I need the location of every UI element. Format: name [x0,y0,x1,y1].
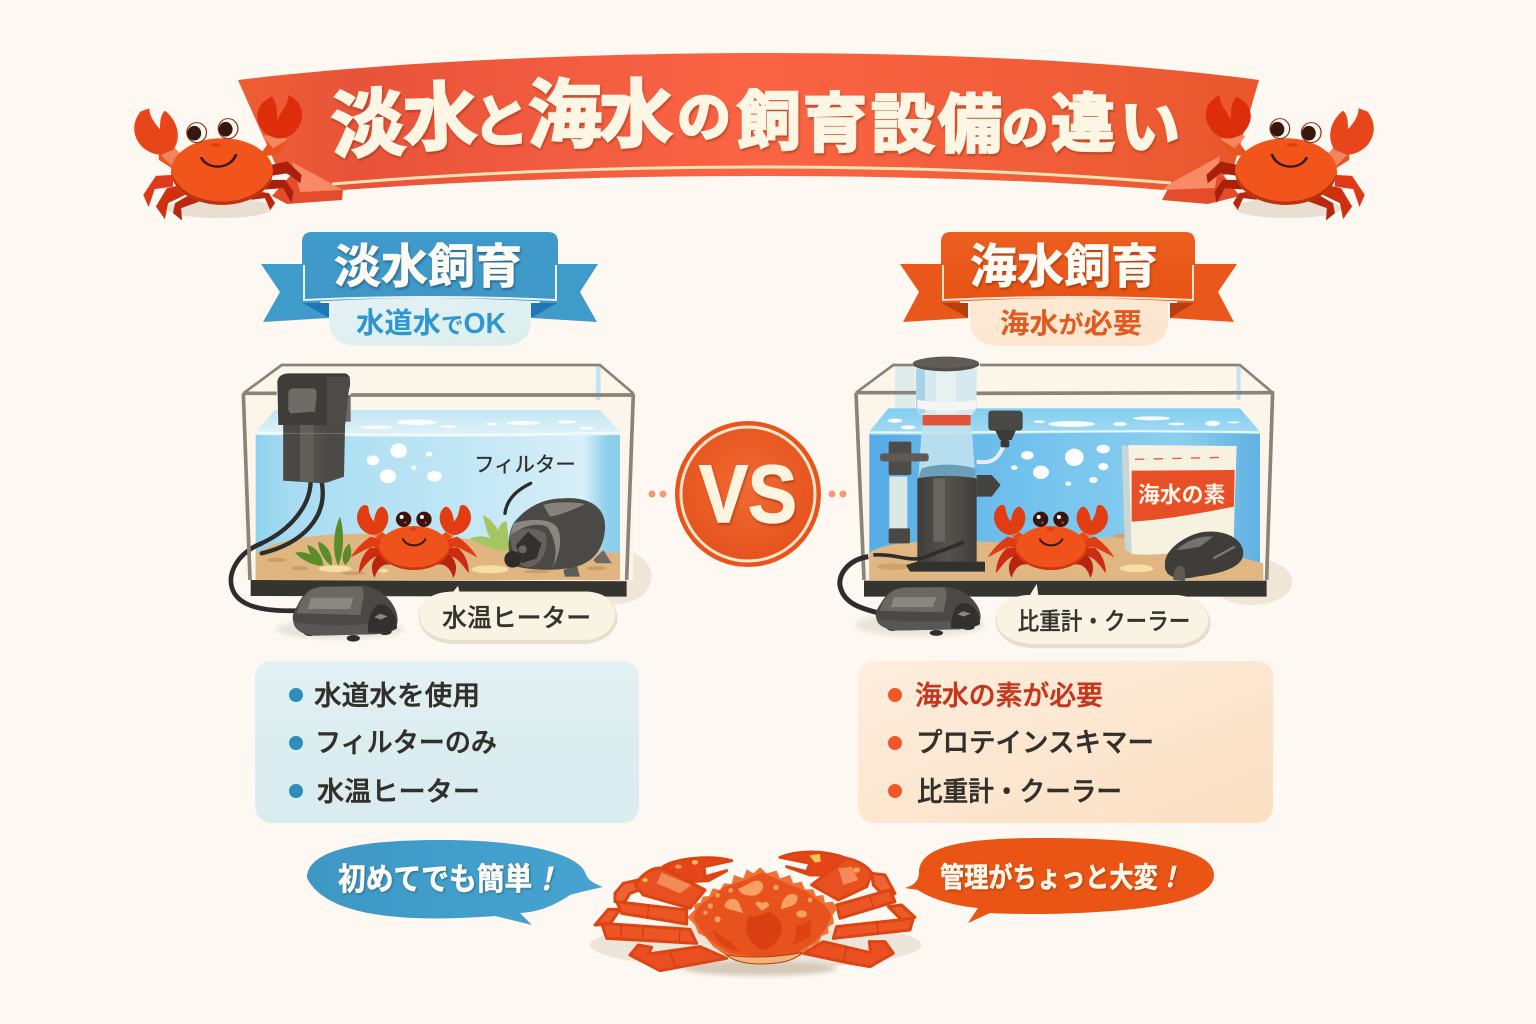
subtitle pill [970,298,1168,346]
banner ribbon [238,53,1259,190]
specific gravity and cooler callout [996,584,1211,648]
bubble text: 管理がちょっと大変！ [940,861,1182,893]
ribbon heading: 海水飼育 [970,240,1158,293]
ribbon main [941,232,1195,302]
title text: の [1002,102,1048,154]
ground shadow [590,921,921,969]
left legs [595,858,732,971]
title text: 飼 [737,86,801,158]
tank shadow [582,549,652,604]
tank frame [856,365,1273,580]
crab mascot left [134,95,302,220]
bullet 3: 水温ヒーター [317,777,480,807]
specific gravity and cooler callout: 比重計・クーラー [1018,608,1190,635]
title text: 水 [599,74,673,156]
banner left tail [272,165,343,204]
bullet 2: プロテインスキマー [916,728,1154,758]
large snow crab [590,852,921,976]
subtitle: 海水が必要 [1000,308,1142,339]
water surface [256,410,620,437]
surface highlights [888,416,1239,429]
banner stripe [332,167,1171,184]
leg segment lines [621,897,878,966]
small pump [1165,532,1243,581]
connector dots left [648,490,666,498]
banner fold left [292,162,343,192]
crab [988,505,1114,578]
VS badge [648,421,846,567]
freshwater feature panel [255,661,639,823]
title text: の [677,88,731,148]
bullet 3: 比重計・クーラー [917,777,1122,807]
title text: 水 [402,75,478,161]
title text: 違 [1051,88,1115,160]
tank frame [243,365,633,580]
freshwater tank [231,365,652,644]
plant right [470,515,510,550]
heater cables [231,482,323,611]
filter label and pointer: フィルター [474,454,576,477]
bubbles [367,443,442,483]
air pump [876,587,981,636]
filter pump [504,498,612,577]
tank shadow [1211,558,1292,605]
title text: 淡 [329,82,407,168]
bubbles [1011,445,1110,486]
claw spots [642,854,860,882]
saltwater feature panel [858,661,1273,823]
crab mascot right [1206,95,1374,220]
ribbon heading: 淡水飼育 [334,240,522,293]
sea salt bag: 海水の素 [1138,483,1225,508]
tank base [864,581,1267,597]
title banner [238,53,1259,204]
water body [869,433,1260,580]
title text: 海 [528,74,602,156]
badge circle [675,421,821,567]
sand [256,534,620,580]
title text: 備 [938,89,1002,161]
bullet 1: 海水の素が必要 [915,681,1103,711]
saltwater header ribbon [900,232,1237,346]
VS text: VS [699,449,797,540]
ribbon main [302,232,558,302]
sand [869,536,1263,580]
water body [256,435,620,580]
title text: い [1120,94,1180,162]
title text [329,74,1180,168]
right legs [780,852,915,967]
air pump [293,586,398,642]
freshwater header ribbon [261,232,598,346]
glass body [856,365,1273,580]
protein skimmer [873,357,1023,572]
bullet 2: フィルターのみ [315,728,497,758]
speech bubble: easy [307,840,603,925]
air tube [840,557,880,613]
banner right tail [1162,165,1240,204]
speech bubble: hard [905,838,1214,923]
connector dots right [828,490,846,498]
plant left [295,517,351,566]
surface highlights [360,420,594,430]
title text: と [473,90,529,154]
heater callout [418,586,617,644]
ribbon tails [261,264,328,322]
subtitle: 水道水でOK [356,307,506,340]
water surface [869,408,1260,436]
title text: 設 [871,89,935,161]
glass body [243,365,633,580]
heater callout: 水温ヒーター [442,605,591,633]
title text: 育 [803,88,867,160]
bullet 1: 水道水を使用 [314,681,480,711]
carapace [687,867,837,964]
bubble text: 初めてでも簡単！ [338,862,560,897]
tank base [251,580,627,597]
filter label and pointer [474,454,576,513]
subtitle pill [329,298,531,346]
crab [351,505,477,578]
banner fold right [1162,156,1220,190]
ribbon tails [900,264,968,322]
sea salt bag [1122,445,1237,555]
hang-on filter box [277,373,351,483]
saltwater tank [840,357,1292,648]
